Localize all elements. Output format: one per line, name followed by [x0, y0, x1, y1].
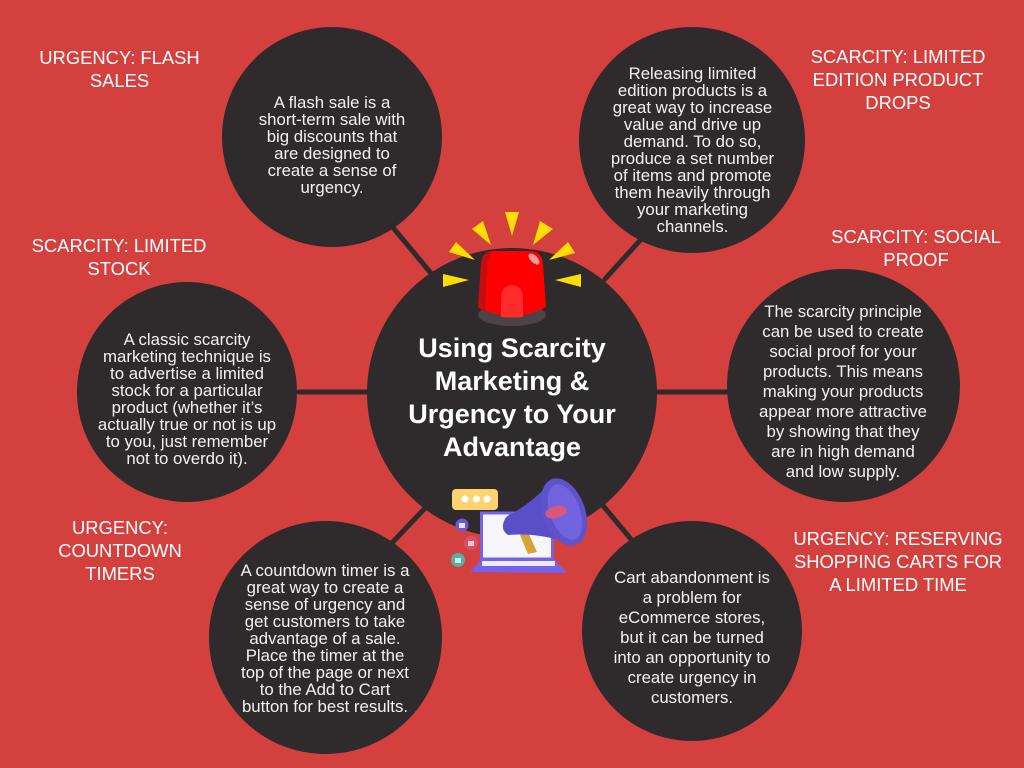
title: Marketing &: [435, 366, 589, 396]
text: social proof: appear more attractive: [759, 402, 927, 421]
heading: scarcity limited stock: [32, 235, 206, 279]
text: limited stock: [98, 330, 276, 468]
text: limited edition: great way to increase: [613, 98, 772, 116]
text: shopping carts: but it can be turned: [620, 628, 764, 647]
heading: scarcity social proof: PROOF: [883, 249, 949, 270]
heading: urgency countdown timers: TIMERS: [85, 563, 155, 584]
text: limited edition: edition products is a: [618, 80, 767, 100]
heading: scarcity social proof: SCARCITY: SOCIAL: [831, 226, 1001, 247]
text: flash sale: [259, 92, 405, 196]
text: flash sale: are designed to: [274, 144, 390, 162]
text: countdown timers: sense of urgency and: [245, 594, 405, 614]
title: Urgency to Your: [408, 399, 616, 429]
text: limited stock: stock for a particular: [111, 380, 263, 400]
heading: urgency reserving shopping carts: [793, 528, 1003, 595]
heading: scarcity limited stock: SCARCITY: LIMITED: [32, 235, 206, 256]
heading: urgency reserving shopping carts: URGENCY: RESERVING: [793, 528, 1003, 549]
text: flash sale: create a sense of: [268, 160, 396, 180]
heading: urgency flash sales: SALES: [90, 70, 149, 91]
text: countdown timers: [240, 560, 410, 716]
text: limited stock: A classic scarcity: [124, 330, 250, 348]
text: social proof: making your products: [763, 382, 923, 401]
text: social proof: by showing that they: [766, 422, 920, 441]
text: limited edition: channels.: [657, 216, 728, 236]
text: countdown timers: button for best results.: [242, 696, 408, 716]
text: limited stock: product (whether it’s: [112, 398, 262, 416]
text: limited stock: not to overdo it).: [126, 448, 248, 468]
text: social proof: and low supply.: [786, 462, 900, 481]
text: flash sale: A flash sale is a: [274, 92, 390, 112]
text: social proof: The scarcity principle: [764, 302, 922, 321]
text: shopping carts: [614, 568, 770, 707]
title: Using Scarcity: [418, 333, 606, 363]
text: shopping carts: create urgency in: [628, 668, 756, 687]
heading: scarcity limited stock: STOCK: [87, 258, 151, 279]
heading: scarcity social proof: [831, 226, 1001, 270]
text: limited edition: produce a set number: [611, 148, 774, 168]
title: [408, 333, 616, 462]
text: flash sale: urgency.: [300, 178, 364, 196]
heading: scarcity limited edition: EDITION PRODUCT: [813, 69, 983, 90]
text: limited edition: demand. To do so,: [624, 132, 761, 150]
heading: urgency reserving shopping carts: SHOPPING CARTS FOR: [794, 551, 1002, 572]
text: flash sale: short-term sale with: [259, 110, 405, 128]
text: social proof: [759, 302, 927, 481]
text: countdown timers: to the Add to Cart: [260, 680, 390, 698]
text: countdown timers: Place the timer at the: [246, 646, 404, 664]
heading: urgency flash sales: URGENCY: FLASH: [39, 47, 200, 68]
text: limited stock: to advertise a limited: [110, 364, 264, 382]
text: limited stock: actually true or not is up: [98, 414, 276, 434]
text: limited edition: [611, 64, 774, 236]
text: social proof: products. This means: [763, 362, 923, 381]
heading: urgency reserving shopping carts: A LIMITED TIME: [829, 574, 967, 595]
text: social proof: can be used to create: [762, 322, 924, 341]
text: shopping carts: customers.: [651, 688, 733, 707]
heading: scarcity limited edition: [811, 46, 985, 113]
text: countdown timers: get customers to take: [245, 612, 405, 630]
text: countdown timers: great way to create a: [247, 578, 403, 596]
text: social proof: are in high demand: [771, 442, 915, 461]
text: countdown timers: A countdown timer is a: [241, 560, 409, 580]
heading: urgency countdown timers: [58, 517, 182, 584]
text: limited stock: to you, just remember: [106, 432, 268, 450]
heading: urgency countdown timers: URGENCY:: [72, 517, 168, 538]
text: limited edition: Releasing limited: [629, 64, 756, 82]
text: limited stock: marketing technique is: [103, 346, 271, 366]
text: limited edition: of items and promote: [614, 166, 771, 184]
title: Advantage: [443, 432, 581, 462]
heading: urgency countdown timers: COUNTDOWN: [58, 540, 182, 561]
heading: scarcity limited edition: SCARCITY: LIMITED: [811, 46, 985, 67]
text: shopping carts: a problem for: [643, 588, 741, 607]
text: shopping carts: Cart abandonment is: [614, 568, 770, 587]
text: limited edition: your marketing: [637, 200, 748, 218]
text: limited edition: them heavily through: [615, 182, 770, 202]
heading: urgency flash sales: [39, 47, 200, 91]
text: flash sale: big discounts that: [267, 126, 397, 146]
text: shopping carts: eCommerce stores,: [619, 608, 765, 627]
text: countdown timers: top of the page or next: [241, 662, 409, 682]
heading: scarcity limited edition: DROPS: [865, 92, 931, 113]
text: social proof: social proof for your: [769, 342, 917, 361]
text: shopping carts: into an opportunity to: [614, 648, 770, 667]
text: limited edition: value and drive up: [624, 114, 761, 134]
text: countdown timers: advantage of a sale.: [249, 628, 401, 648]
